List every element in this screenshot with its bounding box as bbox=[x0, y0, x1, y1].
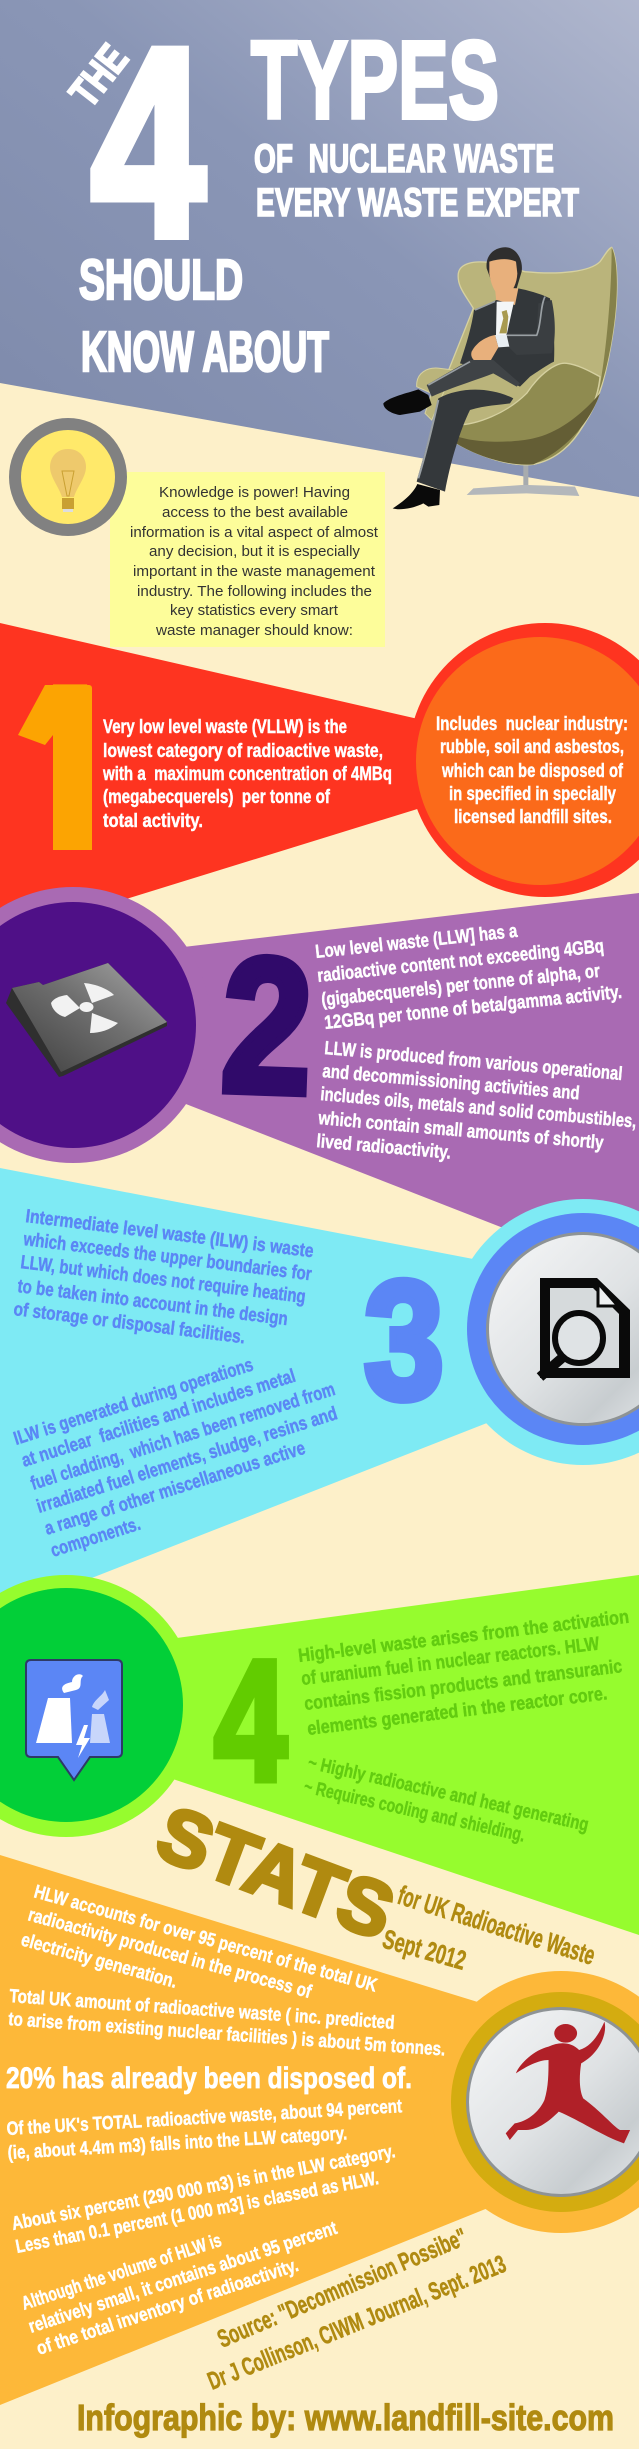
panel: type 2 low level waste bbox=[0, 887, 639, 1281]
number 4: 4 bbox=[214, 1625, 287, 1817]
panel: introduction text bbox=[110, 472, 385, 647]
text: stats HLW share bbox=[19, 1882, 380, 2003]
panel: stats background bbox=[0, 1855, 639, 2405]
text: ILW definition: LLW, but which does not require heating bbox=[19, 1252, 307, 1308]
panel: type 4 high level waste bbox=[0, 1575, 639, 1935]
heading: STATS: STATS bbox=[146, 1788, 405, 1956]
text: stats LLW share bbox=[6, 2096, 403, 2164]
icon: radiation folder bbox=[6, 963, 167, 1077]
text: VLLW definition: (megabecquerels) per tonne of bbox=[103, 787, 331, 808]
text: ILW sources: at nuclear facilities and includes metal bbox=[19, 1366, 298, 1472]
panel: introduction text: Knowledge is power! Having bbox=[159, 484, 350, 501]
text: VLLW definition: Very low level waste (VLLW) is the bbox=[103, 717, 347, 738]
panel: introduction text: important in the waste management bbox=[133, 563, 376, 580]
text: ILW sources: components. bbox=[48, 1514, 143, 1562]
text: VLLW definition: total activity. bbox=[103, 811, 203, 832]
text: stats ILW and HLW share: About six percent (290 000 m3) is in the ILW category. bbox=[10, 2141, 397, 2235]
header panel background bbox=[0, 0, 639, 497]
text: VLLW includes bbox=[436, 714, 628, 828]
text: stats LLW share: Of the UK's TOTAL radioactive waste, about 94 percent bbox=[6, 2096, 403, 2140]
callout: 20% disposed: 20% has already been disposed of. bbox=[6, 2062, 412, 2095]
circle: type 1 detail bbox=[408, 623, 639, 897]
text: ILW sources: a range of other miscellaneous active bbox=[42, 1438, 308, 1540]
source credit: Source: "Decommission Possibe" bbox=[213, 2223, 471, 2354]
circle: type 4 icon background bbox=[0, 1575, 197, 1837]
text: stats HLW share: radioactivity produced in the process of bbox=[26, 1905, 314, 2003]
panel: type 1 very low level waste bbox=[0, 623, 639, 938]
subheading: for UK radioactive waste: Sept 2012 bbox=[379, 1924, 469, 1976]
text: stats total amount bbox=[8, 1986, 446, 2061]
text: ILW definition: which exceeds the upper boundaries for bbox=[22, 1229, 313, 1285]
title: SHOULD bbox=[79, 248, 243, 312]
icon: businessman in egg chair bbox=[383, 247, 617, 509]
text: ILW definition bbox=[12, 1206, 315, 1348]
text: LLW sources: lived radioactivity. bbox=[316, 1131, 452, 1164]
text: ILW sources: irradiated fuel elements, sludge, resins and bbox=[34, 1403, 340, 1518]
text: stats HLW share: HLW accounts for over 95 percent of the total UK bbox=[32, 1882, 380, 1997]
text: ILW definition: to be taken into account in the design bbox=[16, 1276, 289, 1330]
text: ILW sources: fuel cladding, which has been removed from bbox=[28, 1379, 338, 1495]
circle: type 2 icon background bbox=[0, 887, 211, 1163]
number 2: 2 bbox=[218, 916, 316, 1135]
panel: type 3 intermediate level waste bbox=[0, 1168, 639, 1614]
text: ILW definition: of storage or disposal facilities. bbox=[12, 1299, 246, 1348]
panel: introduction text: industry. The following includes the bbox=[137, 583, 372, 600]
title: TYPES bbox=[251, 19, 499, 142]
text: LLW sources bbox=[316, 1038, 637, 1164]
text: VLLW definition bbox=[102, 717, 392, 832]
text: stats HLW radioactivity: of the total inventory of radioactivity. bbox=[34, 2255, 301, 2360]
text: stats LLW share: (ie, about 4.4m m3) falls into the LLW category. bbox=[7, 2123, 348, 2164]
text: ILW sources bbox=[11, 1355, 340, 1562]
panel: introduction text: access to the best available bbox=[162, 504, 348, 521]
title: THE bbox=[60, 35, 137, 116]
text: stats total amount: to arise from existing nuclear facilities ) is about 5m tonnes. bbox=[8, 2009, 446, 2061]
panel: introduction text: key statistics every smart bbox=[170, 602, 339, 619]
icon: document with magnifier bbox=[540, 1278, 630, 1378]
text: HLW definition bbox=[297, 1607, 630, 1740]
heading: STATS bbox=[146, 1788, 599, 1976]
number 1 bbox=[18, 684, 92, 850]
text: LLW definition: Low level waste (LLW] has a bbox=[314, 921, 519, 963]
text: LLW definition bbox=[314, 921, 623, 1034]
text: LLW sources: and decommissioning activities and bbox=[322, 1061, 580, 1104]
circle: runner icon background bbox=[430, 1971, 639, 2233]
text: stats ILW and HLW share: Less than 0.1 percent (1 000 m3] is classed as HLW. bbox=[14, 2168, 380, 2258]
panel: introduction text: waste manager should know: bbox=[155, 622, 353, 639]
circle: type 3 icon background bbox=[450, 1199, 639, 1465]
text: ILW sources: ILW is generated during operations bbox=[11, 1355, 256, 1450]
text: stats HLW radioactivity: Although the volume of HLW is bbox=[19, 2230, 224, 2315]
title: KNOW ABOUT bbox=[81, 320, 329, 384]
text: stats HLW share: electricity generation. bbox=[19, 1930, 179, 1993]
icon: running figure bbox=[506, 2022, 630, 2143]
title: 4 bbox=[91, 0, 206, 292]
icon: light bulb bbox=[9, 418, 127, 536]
text: VLLW definition: lowest category of radioactive waste, bbox=[103, 741, 383, 762]
title bbox=[60, 0, 579, 384]
number 3: 3 bbox=[364, 1246, 444, 1434]
text: VLLW definition: with a maximum concentration of 4MBq bbox=[102, 764, 392, 785]
subheading: for UK radioactive waste bbox=[379, 1880, 599, 1976]
text: ILW definition: Intermediate level waste (ILW) is waste bbox=[24, 1206, 315, 1262]
text: HLW bullet points: ~ Requires cooling and shielding. bbox=[302, 1776, 527, 1847]
source credit bbox=[204, 2223, 510, 2396]
panel: introduction text: any decision, but it is especially bbox=[149, 543, 360, 560]
text: stats HLW radioactivity: relatively small, it contains about 95 percent bbox=[26, 2218, 340, 2338]
icon: power station pin bbox=[26, 1660, 122, 1780]
text: stats total amount: Total UK amount of radioactive waste ( inc. predicted bbox=[9, 1986, 395, 2034]
panel: introduction text: information is a vital aspect of almost bbox=[130, 524, 379, 541]
